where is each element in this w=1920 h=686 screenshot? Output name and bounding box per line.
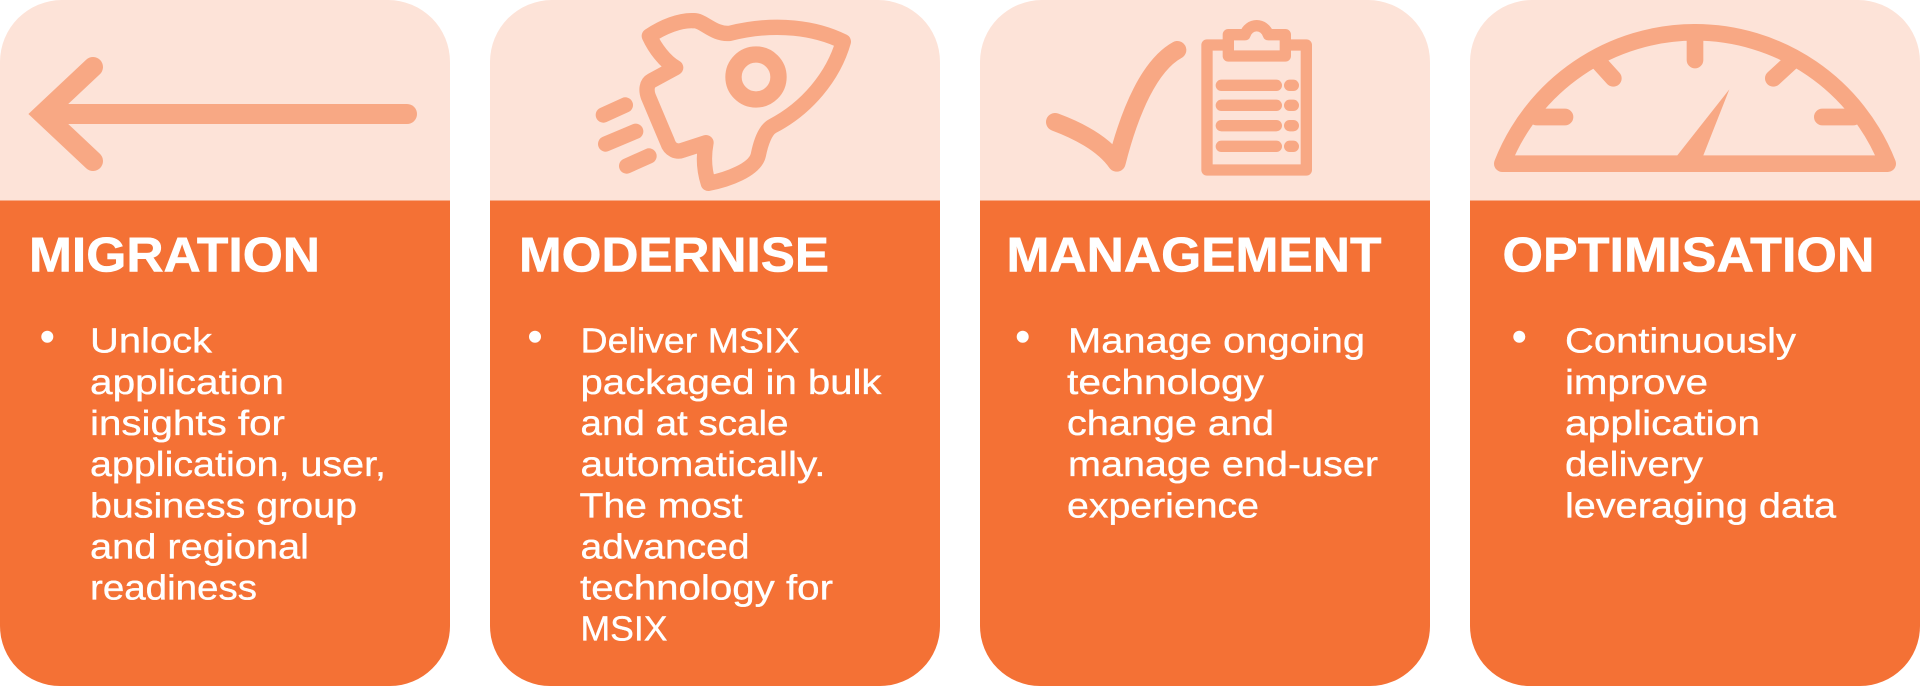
body text: insights for	[90, 404, 285, 443]
bullet	[1017, 331, 1029, 343]
bullet	[529, 331, 541, 343]
body text: and regional	[90, 527, 309, 566]
body text: experience	[1067, 486, 1259, 525]
panel: migration	[0, 0, 450, 686]
panel: modernise	[490, 0, 940, 686]
icon panel	[490, 0, 940, 200]
body text: advanced	[580, 527, 750, 566]
heading: MANAGEMENT	[1006, 229, 1382, 283]
body text: technology for	[580, 568, 833, 608]
body text	[1067, 322, 1378, 525]
panel: optimisation	[1470, 0, 1920, 686]
body text: automatically.	[580, 445, 826, 484]
body text: Deliver MSIX	[580, 322, 800, 361]
body text: leveraging data	[1565, 486, 1837, 525]
icon panel	[980, 0, 1430, 200]
body text: application, user,	[90, 445, 386, 484]
body text: delivery	[1565, 445, 1704, 484]
body text: manage end-user	[1068, 445, 1378, 484]
panel background	[490, 200, 940, 686]
body text	[90, 322, 386, 608]
body text: Manage ongoing	[1068, 322, 1365, 361]
body text: improve	[1565, 363, 1708, 402]
body text: business group	[90, 486, 357, 525]
icon: check mark	[1055, 50, 1177, 163]
body text: technology	[1067, 363, 1265, 402]
body text: application	[1565, 404, 1760, 443]
body text	[1565, 322, 1837, 525]
icon: rocket	[603, 21, 843, 183]
bullet	[41, 331, 53, 343]
panel: management	[980, 0, 1430, 686]
panel background	[1470, 200, 1920, 686]
panel background	[980, 200, 1430, 686]
icon: left arrow	[43, 67, 407, 161]
icon: clipboard	[1207, 26, 1306, 170]
icon: speedometer	[1502, 32, 1888, 164]
body text: Continuously	[1565, 322, 1797, 361]
icon panel	[0, 0, 450, 200]
heading: MIGRATION	[29, 229, 320, 283]
body text: Unlock	[90, 322, 213, 361]
body text: packaged in bulk	[580, 363, 882, 402]
body text: The most	[580, 486, 743, 525]
body text	[580, 322, 882, 649]
body text: application	[90, 363, 284, 402]
panel background	[0, 200, 450, 686]
body text: change and	[1067, 404, 1274, 443]
body text: readiness	[90, 568, 257, 608]
bullet	[1513, 331, 1525, 343]
icon panel	[1470, 0, 1920, 200]
heading: MODERNISE	[519, 229, 829, 283]
heading: OPTIMISATION	[1502, 229, 1874, 283]
body text: MSIX	[580, 610, 668, 649]
body text: and at scale	[580, 404, 788, 443]
